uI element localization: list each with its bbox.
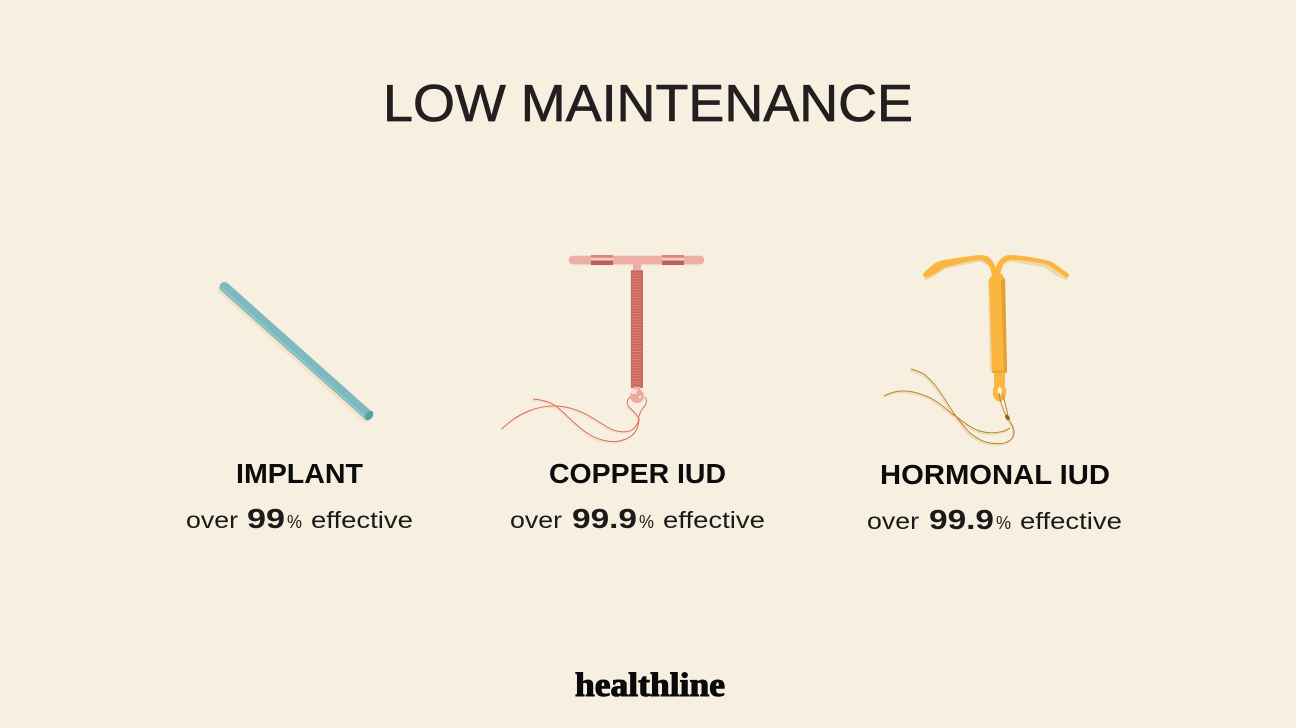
text: implant effectiveness: 99 (247, 503, 285, 534)
text: hormonal IUD effectiveness (867, 504, 1122, 535)
icon: copper IUD (501, 255, 700, 443)
text: copper IUD effectiveness: % (639, 511, 654, 532)
heading: copper IUD: COPPER IUD (549, 458, 726, 489)
panel: copper IUD (501, 255, 765, 534)
text: hormonal IUD effectiveness: over (867, 508, 919, 534)
title: LOW MAINTENANCE (383, 75, 913, 133)
text: implant effectiveness: % (287, 511, 302, 532)
text: hormonal IUD effectiveness: 99.9 (929, 504, 994, 535)
heading: implant: IMPLANT (236, 458, 363, 489)
text: copper IUD effectiveness: over (510, 507, 562, 533)
panel: implant (186, 287, 413, 534)
icon: implant rod (222, 287, 375, 422)
text: hormonal IUD effectiveness: effective (1020, 508, 1122, 534)
text: implant effectiveness: effective (311, 507, 413, 533)
heading: hormonal IUD: HORMONAL IUD (880, 459, 1110, 490)
icon: hormonal IUD (883, 255, 1069, 445)
text: implant effectiveness: over (186, 507, 238, 533)
text: implant effectiveness (186, 503, 413, 534)
logo: healthline: healthline (575, 667, 725, 704)
text: copper IUD effectiveness (510, 503, 765, 534)
panel: hormonal IUD (867, 255, 1122, 535)
text: hormonal IUD effectiveness: % (996, 512, 1011, 533)
text: copper IUD effectiveness: 99.9 (572, 503, 637, 534)
text: copper IUD effectiveness: effective (663, 507, 765, 533)
